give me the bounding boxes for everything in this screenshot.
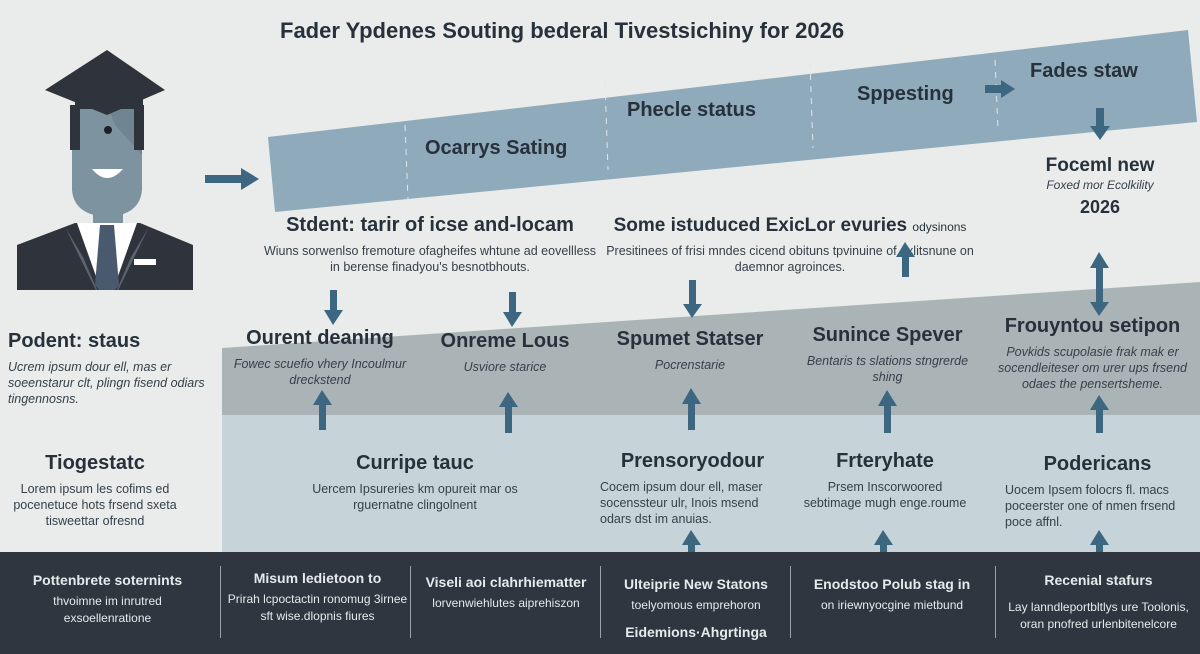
block: Tiogestatc: Lorem ipsum les cofims ed pocenetuce hots frsend sxeta tisweettar ofresnd bbox=[13, 482, 177, 528]
footer bar: Lay lanndleportbltlys ure Toolonis, oran pnofred urlenbitenelcore bbox=[1008, 600, 1189, 631]
footer bar: Pottenbrete soternints bbox=[33, 572, 182, 588]
footer bar: Viseli aoi clahrhiematter bbox=[426, 574, 586, 590]
block: Foceml new bbox=[1046, 108, 1154, 217]
footer bar: thvoimne im inrutred exsoellenratione bbox=[53, 594, 162, 625]
block: Curripe tauc bbox=[312, 452, 518, 512]
block: Sunince Spever: Bentaris ts slations stngrerde shing bbox=[807, 354, 968, 384]
block: Onreme Lous: Usviore starice bbox=[464, 360, 546, 374]
title: Fader Ypdenes Souting bederal Tivestsichiny for 2026 bbox=[280, 18, 844, 43]
footer bar: Misum ledietoon to bbox=[254, 570, 381, 586]
block: Some istuduced: Some istuduced ExicLor evuries odysinons bbox=[614, 215, 966, 236]
block: Podent status: Podent: staus bbox=[8, 330, 140, 352]
block: Stdent: Wiuns sorwenlso fremoture ofagheifes whtune ad eovellless in berense finadyou's besnotbhouts. bbox=[264, 244, 596, 274]
block: Onreme Lous: Onreme Lous bbox=[441, 330, 569, 352]
block: Spumet Statser bbox=[617, 328, 764, 372]
block: Sunince Spever: Sunince Spever bbox=[812, 324, 963, 346]
block: Prensoryodour: Prensoryodour bbox=[621, 450, 764, 472]
block: Ourent deaning: Fowec scuefio vhery Incoulmur dreckstend bbox=[234, 357, 406, 387]
block: Frouyntou setipon: Frouyntou setipon bbox=[1005, 315, 1180, 337]
icon: graduate person bbox=[17, 50, 193, 290]
arrow: to ribbon bbox=[205, 168, 259, 190]
ribbon labels: Ocarrys Sating bbox=[425, 137, 567, 159]
block: Sunince Spever bbox=[807, 324, 968, 384]
arrow: to fades bbox=[985, 80, 1015, 98]
block: Foceml new: Foxed mor Ecolkility bbox=[1046, 178, 1154, 192]
block: Podent status: Ucrem ipsum dour ell, mas er soeenstarur clt, plingn fisend odiars tingennosns. bbox=[8, 360, 205, 406]
footer bar: Prirah lcpoctactin ronomug 3irnee sft wise.dlopnis fiures bbox=[228, 592, 407, 623]
block: Curripe tauc: Curripe tauc bbox=[356, 452, 474, 474]
block: Frteryhate: Frteryhate bbox=[836, 450, 934, 472]
block: Foceml new: Foceml new bbox=[1046, 155, 1154, 176]
block: Tiogestatc bbox=[13, 452, 177, 528]
text: Fades staw bbox=[1030, 60, 1138, 82]
block: Podericans bbox=[1005, 453, 1175, 529]
block: Frteryhate bbox=[804, 450, 966, 510]
block: Stdent: Stdent: tarir of icse and-locam bbox=[286, 214, 574, 236]
footer bar: Enodstoo Polub stag in bbox=[814, 576, 970, 592]
block: Ourent deaning: Ourent deaning bbox=[246, 327, 394, 349]
block: Frteryhate: Prsem Inscorwoored sebtimage mugh enge.roume bbox=[804, 480, 966, 510]
footer bar: Recenial stafurs bbox=[1044, 572, 1153, 588]
block: Some istuduced bbox=[606, 215, 974, 274]
text: Phecle status bbox=[627, 99, 756, 121]
block: Podent status bbox=[8, 330, 205, 406]
block: Spumet Statser: Pocrenstarie bbox=[655, 358, 725, 372]
footer bar bbox=[0, 552, 1200, 654]
block: Spumet Statser: Spumet Statser bbox=[617, 328, 763, 350]
footer bar: Ulteiprie New Statons bbox=[624, 576, 768, 592]
text: Sppesting bbox=[857, 83, 954, 105]
footer bar: toelyomous emprehoron bbox=[631, 598, 761, 612]
footer bar: Eidemions·Ahgrtinga bbox=[625, 624, 767, 640]
block: Ourent deaning bbox=[234, 327, 407, 387]
block: Prensoryodour bbox=[600, 450, 764, 526]
block: Podericans: Podericans bbox=[1044, 453, 1151, 475]
block: Foceml new: 2026 bbox=[1080, 197, 1120, 217]
block: Prensoryodour: Cocem ipsum dour ell, maser socenssteur ulr, Inois msend odars dst im anuias. bbox=[600, 480, 763, 526]
block: Podericans: Uocem Ipsem folocrs fl. macs poceerster one of nmen frsend poce affnl. bbox=[1005, 483, 1175, 529]
footer bar: lorvenwiehlutes aiprehiszon bbox=[432, 596, 580, 610]
block: Onreme Lous bbox=[441, 330, 569, 374]
footer bar: on iriewnyocgine mietbund bbox=[821, 598, 963, 612]
block: Curripe tauc: Uercem Ipsureries km opureit mar os rguernatne clingolnent bbox=[312, 482, 518, 512]
block: Frouyntou setipon: Povkids scupolasie frak mak er socendleiteser om urer ups frsend odaes the pensertsheme. bbox=[998, 345, 1187, 391]
block: Frouyntou setipon bbox=[998, 315, 1188, 391]
block: Some istuduced: Presitinees of frisi mndes cicend obituns tpvinuine of exlitsnune on daemnor agroinces. bbox=[606, 244, 974, 274]
block: Tiogestatc: Tiogestatc bbox=[45, 452, 145, 474]
block: Stdent bbox=[264, 214, 596, 274]
